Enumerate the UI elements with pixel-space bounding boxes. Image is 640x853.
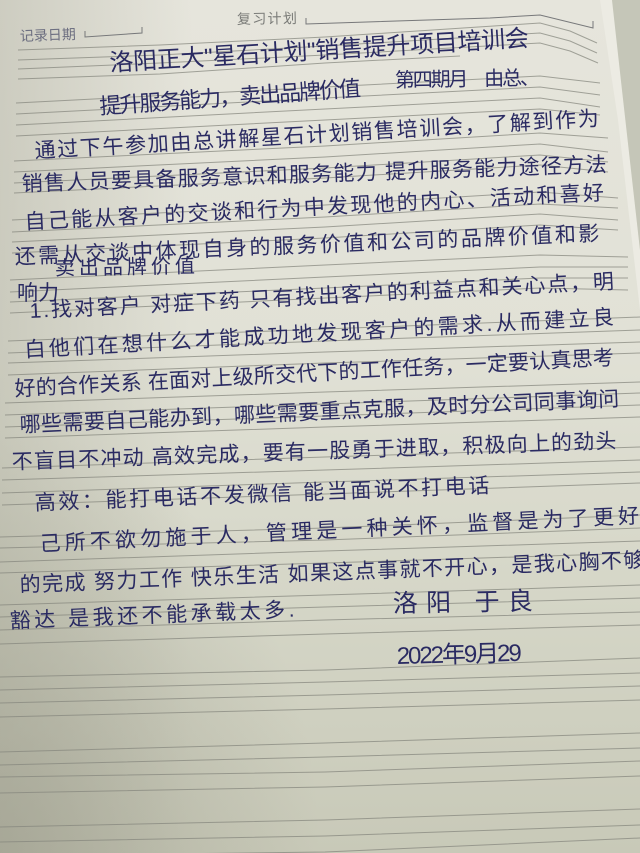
printed header [20,10,297,44]
date: 2022年9月29 [396,640,522,670]
paragraph three: 己所不欲勿施于人，管理是一种关怀，监督是为了更好 [39,505,640,556]
paragraph three: 的完成 努力工作 快乐生活 如果这点事就不开心，是我心胸不够 [19,549,640,597]
paragraph two [11,270,620,474]
title: 洛阳正大"星石计划"销售提升项目培训会 [109,25,530,77]
paragraph three: 豁达 是我还不能承载太多. [9,599,295,633]
paragraph two: 不盲目不冲动 高效完成，要有一股勇于进取，积极向上的劲头 [11,430,617,474]
handwritten notes [9,25,640,670]
label: review plan: 复习计划 [237,10,297,27]
subtitle right: 第四期月 由总、 [395,66,540,92]
date bracket [85,15,593,37]
label: record date: 记录日期 [20,26,76,44]
right page edge [612,0,640,250]
paragraph one: 自己能从客户的交谈和行为中发现他的内心、活动和喜好 [24,182,605,234]
paragraph two: 哪些需要自己能办到，哪些需要重点克服，及时分公司同事询问 [19,388,620,437]
paragraph two: 好的合作关系 在面对上级所交代下的工作任务，一定要认真思考 [14,347,614,401]
paragraph three [9,475,640,633]
signature: 洛阳 于良 [393,588,533,618]
section heading: 卖出品牌价值 [55,255,195,280]
paragraph one: 通过下午参加由总讲解星石计划销售培训会，了解到作为 [34,108,599,163]
paragraph one [14,108,607,305]
paragraph one: 还需从交谈中体现自身的服务价值和公司的品牌价值和影 [14,223,600,269]
subtitle left: 提升服务能力，卖出品牌价值 [99,76,362,119]
paragraph three: 高效：能打电话不发微信 能当面说不打电话 [34,475,490,515]
paragraph two: 1.找对客户 对症下药 只有找出客户的利益点和关心点，明 [29,270,615,323]
gutter highlight [600,0,640,310]
paragraph one: 销售人员要具备服务意识和服务能力 提升服务能力途径方法 [21,154,607,196]
paragraph two: 白他们在想什么才能成功地发现客户的需求.从而建立良 [24,306,614,362]
paragraph one: 响力 [17,282,59,305]
